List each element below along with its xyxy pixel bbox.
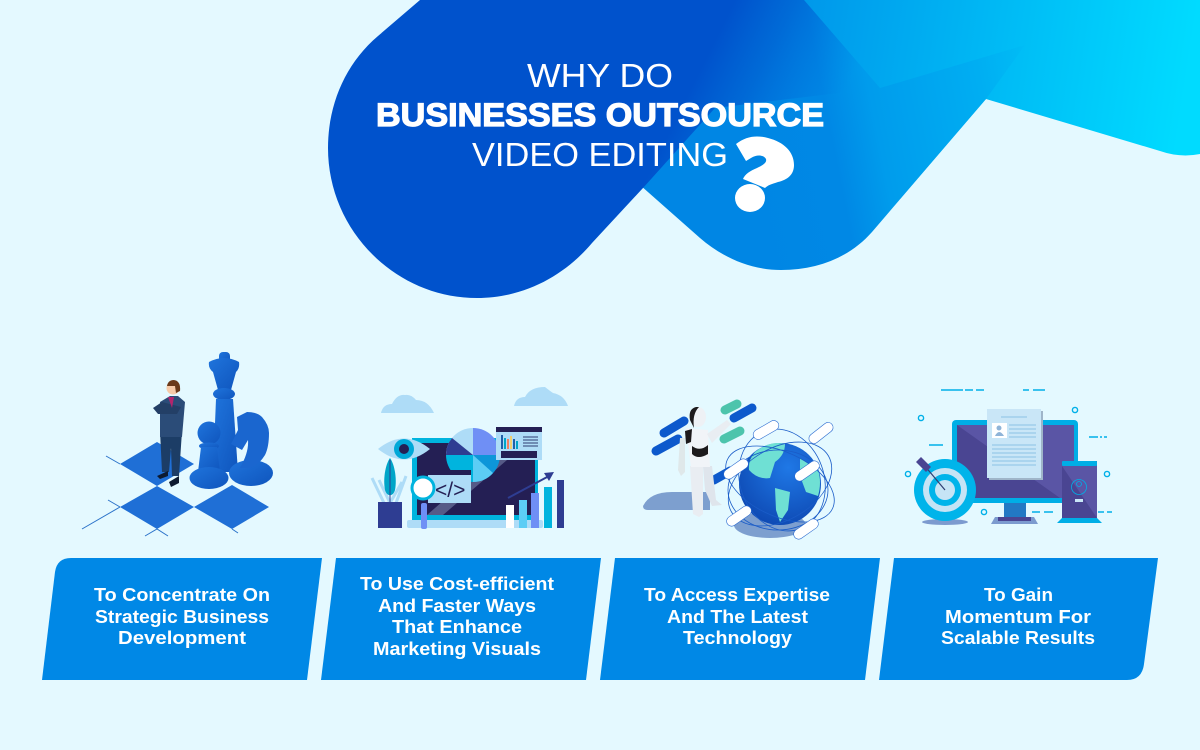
- arrow: [508, 472, 554, 498]
- queen piece: [209, 352, 239, 472]
- bar chart window: [496, 427, 542, 460]
- code window: </>: [435, 479, 465, 502]
- phone: [1057, 461, 1102, 523]
- robot: [678, 407, 731, 517]
- panel: concentrate on strategic business development: To Concentrate On: [94, 585, 270, 605]
- title: VIDEO EDITING: [472, 136, 728, 173]
- panel: momentum for scalable results: To Gain: [984, 585, 1053, 605]
- dashes and rings: [905, 390, 1112, 515]
- panel: cost-efficient and faster ways: [321, 558, 601, 680]
- magnifier: [412, 477, 434, 529]
- panel: concentrate on strategic business development: Development: [118, 628, 246, 648]
- panel: concentrate on strategic business development: Strategic Business: [95, 607, 269, 627]
- illustration: chess strategy: [82, 352, 273, 536]
- panel: cost-efficient and faster ways: And Faster Ways: [378, 596, 536, 616]
- illustration: robot and globe: [643, 404, 846, 543]
- panel: momentum for scalable results: Momentum For: [945, 607, 1091, 627]
- chessboard: [82, 442, 269, 536]
- panel: access expertise and latest technology: [600, 558, 880, 680]
- title: WHY DO: [527, 57, 673, 94]
- growth bars: [506, 480, 564, 528]
- plant: [372, 458, 406, 528]
- clouds: [381, 387, 568, 413]
- shadows: [643, 492, 806, 538]
- monitor: [952, 420, 1078, 524]
- panel: cost-efficient and faster ways: To Use Cost-efficient: [360, 574, 554, 594]
- header blob shapes: [328, 0, 1200, 298]
- code window: [428, 470, 471, 503]
- panel: access expertise and latest technology: And The Latest: [667, 607, 808, 627]
- panel: momentum for scalable results: Scalable Results: [941, 628, 1095, 648]
- panel: access expertise and latest technology: To Access Expertise: [644, 585, 830, 605]
- orbit lines: [714, 417, 846, 543]
- businessman: [153, 380, 185, 487]
- white pills: [722, 419, 835, 541]
- pie chart: [446, 428, 500, 482]
- panel: momentum for scalable results: [879, 558, 1158, 680]
- panel: access expertise and latest technology: Technology: [683, 628, 792, 648]
- title: [376, 57, 824, 173]
- resume document: [987, 409, 1043, 480]
- target: [914, 457, 976, 525]
- illustration: marketing visuals: [372, 387, 568, 529]
- panel: cost-efficient and faster ways: Marketing Visuals: [373, 639, 541, 659]
- icon: question mark: [735, 136, 794, 212]
- panel: concentrate on strategic business development: [42, 558, 322, 680]
- globe: [739, 443, 821, 525]
- floating blue and teal panels: [656, 404, 752, 480]
- laptop: [407, 438, 543, 528]
- panel: cost-efficient and faster ways: That Enhance: [392, 617, 522, 637]
- pawn piece: [190, 422, 228, 489]
- illustration: devices and target: [905, 390, 1112, 525]
- title: BUSINESSES OUTSOURCE: [376, 97, 824, 133]
- knight piece: [229, 412, 273, 486]
- eye: [378, 438, 430, 460]
